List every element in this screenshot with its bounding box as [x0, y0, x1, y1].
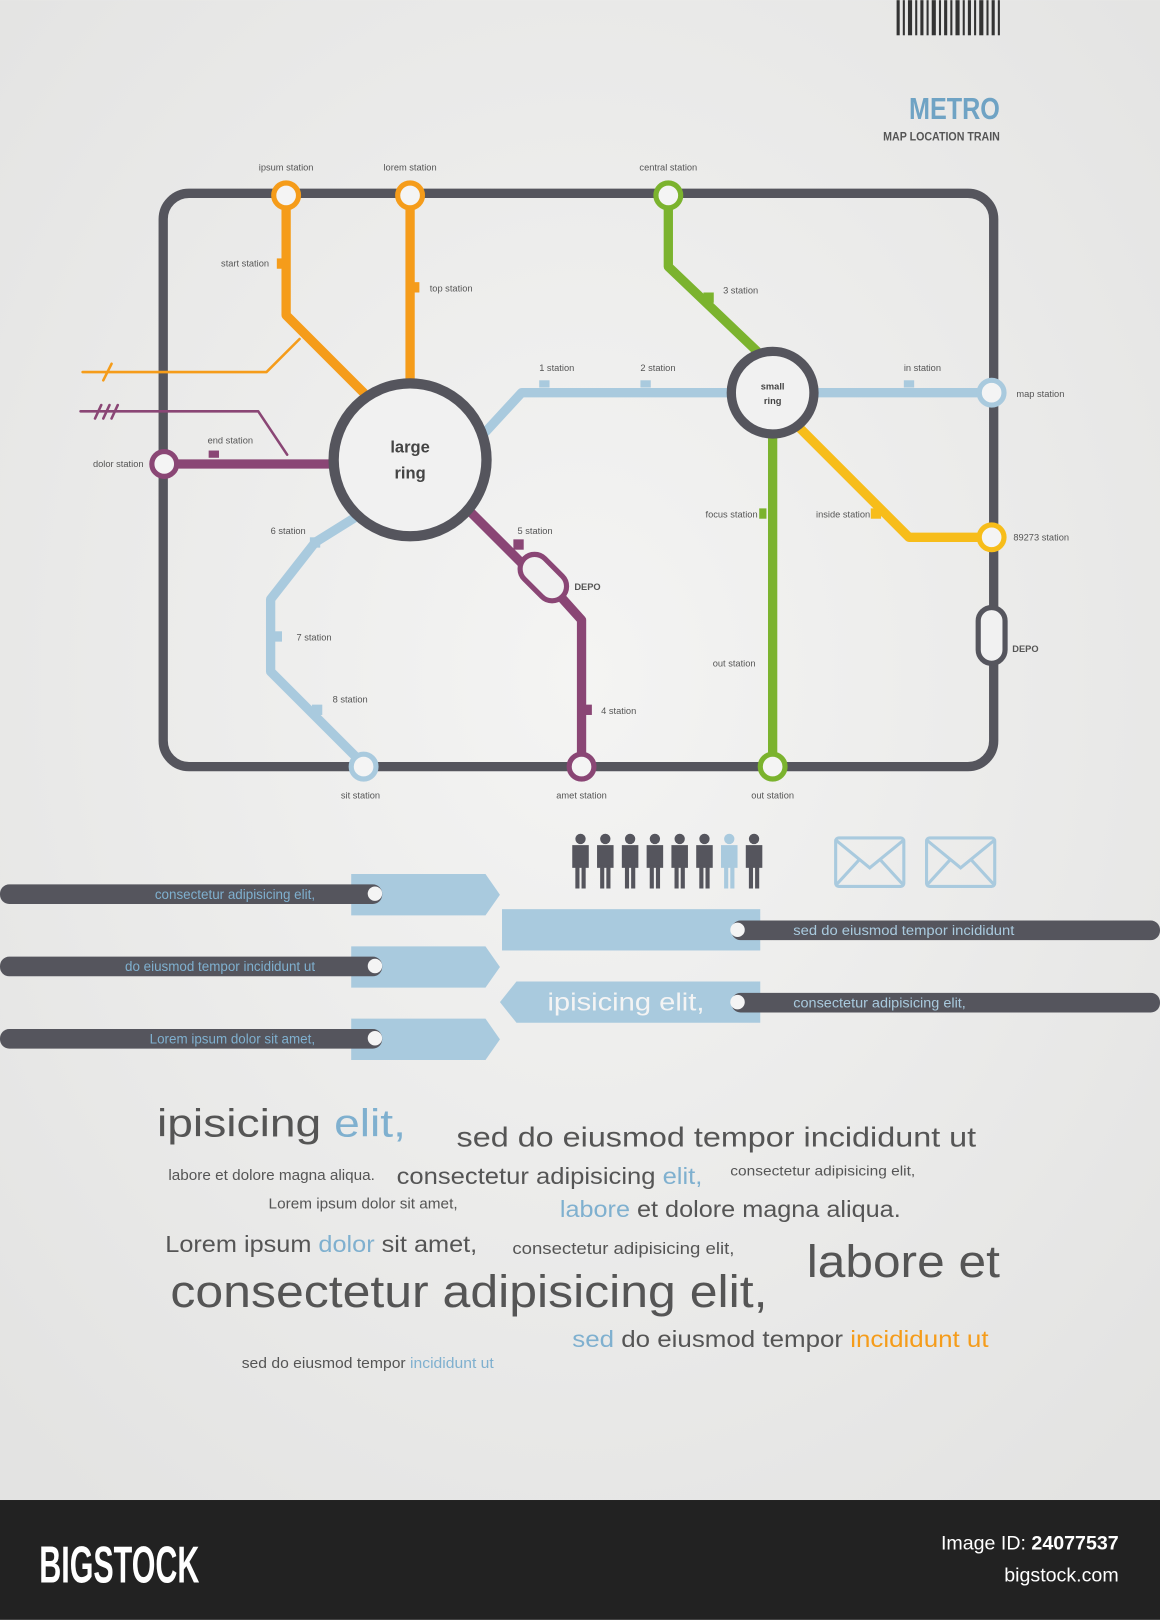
text cloud: labore et	[807, 1236, 1000, 1287]
footer bar: Image ID: 24077537	[941, 1533, 1119, 1555]
text cloud: sed do eiusmod tempor incididunt ut	[572, 1326, 989, 1352]
map labels: map station	[1016, 389, 1064, 399]
green line	[668, 196, 773, 765]
map labels: start station	[221, 259, 269, 269]
map labels: inside station	[816, 510, 870, 520]
left banners: consectetur adipisicing elit,	[155, 887, 315, 902]
map labels: in station	[904, 363, 941, 373]
map labels: ring	[394, 463, 426, 482]
footer bar	[0, 1500, 1160, 1620]
map labels: amet station	[556, 791, 607, 801]
stations	[152, 183, 1004, 779]
map labels: lorem station	[384, 163, 437, 173]
rings	[334, 383, 487, 536]
map labels: 1 station	[539, 363, 574, 373]
barcode	[897, 0, 1000, 35]
footer bar: bigstock.com	[1004, 1565, 1119, 1587]
map labels: out station	[713, 658, 756, 668]
title: MAP LOCATION TRAIN	[883, 130, 1000, 144]
map labels: dolor station	[93, 459, 144, 469]
right banners: consectetur adipisicing elit,	[793, 995, 966, 1010]
text cloud: consectetur adipisicing elit,	[397, 1163, 702, 1189]
text cloud: sed do eiusmod tempor incididunt ut	[242, 1356, 494, 1372]
map labels: 89273 station	[1013, 532, 1069, 542]
orange line	[83, 196, 410, 393]
right banners: ipisicing elit,	[547, 989, 704, 1016]
map labels: DEPO	[1012, 644, 1039, 654]
footer bar: BIGSTOCK	[39, 1536, 199, 1594]
map labels: DEPO	[574, 582, 601, 592]
text cloud: consectetur adipisicing elit,	[170, 1266, 767, 1317]
title	[883, 91, 1000, 144]
text cloud: Lorem ipsum dolor sit amet,	[165, 1231, 477, 1257]
text cloud: sed do eiusmod tempor incididunt ut	[457, 1122, 976, 1153]
map labels: end station	[208, 435, 253, 445]
blue line	[271, 393, 992, 765]
map labels: top station	[430, 283, 473, 293]
text cloud: labore et dolore magna aliqua.	[560, 1196, 901, 1222]
icon: envelopes	[836, 838, 995, 886]
text cloud: ipisicing elit,	[157, 1101, 406, 1145]
map labels: 5 station	[518, 526, 553, 536]
metro map	[81, 183, 1005, 779]
text cloud	[157, 1101, 1000, 1372]
map labels: small	[761, 382, 785, 392]
map labels: large	[390, 438, 430, 457]
text cloud: Lorem ipsum dolor sit amet,	[269, 1197, 458, 1213]
map labels: 8 station	[333, 695, 368, 705]
map labels: ipsum station	[259, 163, 313, 173]
right banners: sed do eiusmod tempor incididunt	[793, 923, 1015, 938]
map labels: 7 station	[296, 633, 332, 643]
text cloud: consectetur adipisicing elit,	[512, 1239, 734, 1258]
icon: people	[572, 834, 762, 889]
station ticks	[209, 258, 914, 715]
map labels: 2 station	[640, 363, 676, 373]
text cloud: labore et dolore magna aliqua.	[168, 1168, 375, 1184]
left banners: do eiusmod tempor incididunt ut	[125, 959, 315, 974]
map labels: central station	[639, 163, 697, 173]
map labels: sit station	[341, 791, 380, 801]
map labels: ring	[764, 396, 782, 406]
map labels: 4 station	[601, 706, 636, 716]
left banners	[0, 874, 500, 1060]
depots	[514, 548, 573, 607]
yellow line	[801, 429, 992, 537]
map labels: 3 station	[723, 286, 758, 296]
map labels: 6 station	[271, 526, 306, 536]
map labels	[93, 163, 1069, 801]
title: METRO	[909, 91, 1000, 126]
map labels: focus station	[706, 510, 758, 520]
text cloud: consectetur adipisicing elit,	[730, 1164, 915, 1179]
purple line	[81, 405, 582, 765]
right banners	[500, 909, 1160, 1023]
map labels: out station	[751, 791, 794, 801]
left banners: Lorem ipsum dolor sit amet,	[150, 1031, 315, 1046]
